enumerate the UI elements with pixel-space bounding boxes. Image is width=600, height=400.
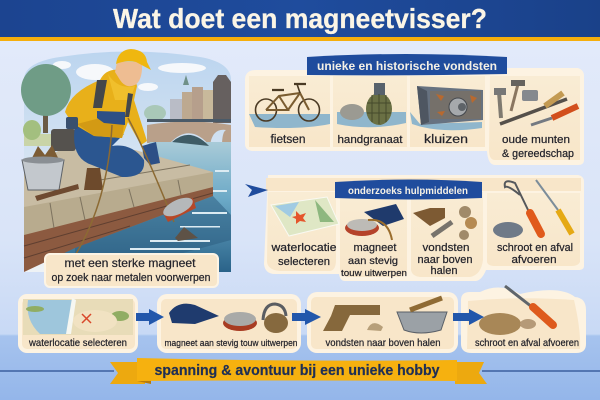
card: oude munten & gereedschap: & gereedschap bbox=[502, 148, 574, 160]
card: fietsen bbox=[249, 76, 330, 147]
step 4: schroot en afval afvoeren: schroot en afval afvoeren bbox=[475, 338, 579, 349]
icon: map bbox=[271, 197, 339, 236]
card: handgranaat: handgranaat bbox=[338, 134, 402, 146]
icon: hook and screwdriver tools bbox=[493, 180, 572, 238]
step 3: vondsten naar boven halen: vondsten naar boven halen bbox=[326, 337, 441, 349]
jeans bbox=[74, 126, 144, 177]
rock block bbox=[51, 129, 76, 151]
title: Wat doet een magneetvisser? bbox=[113, 3, 487, 34]
ribbon: unieke en historische vondsten: unieke en historische vondsten bbox=[317, 61, 497, 73]
step 2: magneet aan stevig touw uitwerpen bbox=[157, 294, 301, 353]
ribbon: unieke en historische vondsten bbox=[307, 54, 507, 75]
card: vondsten naar boven halen: naar boven bbox=[418, 254, 472, 266]
quay top bbox=[24, 150, 213, 210]
panel: unieke en historische vondsten bbox=[245, 54, 584, 165]
scene background bbox=[24, 52, 231, 272]
stone joints bbox=[40, 165, 190, 228]
caption: scene bbox=[45, 254, 218, 287]
icon: hand grenade bbox=[337, 83, 406, 127]
card: waterlocatie selecteren: waterlocatie bbox=[270, 242, 336, 254]
ribbon: onderzoeks hulpmiddelen: onderzoeks hulpmiddelen bbox=[348, 185, 468, 197]
icon: tools bbox=[494, 80, 578, 125]
header banner bbox=[0, 0, 600, 41]
card: schroot en afval afvoeren: schroot en afval bbox=[497, 242, 573, 254]
caption: scene: met een sterke magneet bbox=[64, 256, 196, 270]
icon: magnet with glove bbox=[345, 204, 404, 240]
banner: spanning & avontuur: spanning & avontuur bij een unieke hobby bbox=[154, 362, 440, 379]
quay brick wall bbox=[24, 186, 213, 272]
banner: spanning & avontuur bbox=[110, 358, 487, 384]
hoodie shade bbox=[77, 118, 125, 138]
water dark shore bbox=[75, 196, 231, 272]
icon: map with cross bbox=[23, 298, 133, 335]
glove bbox=[97, 111, 125, 125]
trees bbox=[21, 64, 166, 146]
decorative lines beside banner bbox=[0, 370, 600, 372]
arrow: step 3 to 4 bbox=[453, 309, 484, 325]
caption: scene: op zoek naar metalen voorwerpen bbox=[52, 272, 210, 284]
card: oude munten & gereedschap: oude munten bbox=[502, 134, 570, 146]
step 3: vondsten naar boven halen bbox=[307, 292, 458, 353]
icon: finds bbox=[413, 206, 477, 240]
card: kluizen bbox=[410, 76, 485, 147]
card: schroot en afval afvoeren: afvoeren bbox=[512, 254, 556, 266]
card: vondsten naar boven halen: halen bbox=[430, 265, 458, 277]
card: waterlocatie selecteren bbox=[267, 192, 339, 271]
header strip bbox=[266, 178, 581, 191]
clouds bbox=[53, 61, 206, 91]
icon: pistol and bucket bbox=[323, 298, 447, 333]
card: fietsen: fietsen bbox=[270, 134, 306, 146]
card: handgranaat bbox=[333, 76, 407, 147]
icon: safe bbox=[410, 86, 483, 130]
icon: bicycle bbox=[256, 84, 320, 121]
panel: magneetvisser scene bbox=[21, 49, 231, 272]
icon: rock and screwdriver bbox=[479, 286, 553, 335]
card: magneet aan stevig touw uitwerpen: aan stevig bbox=[348, 255, 398, 267]
yellow hoodie bbox=[65, 70, 147, 145]
second glove bbox=[142, 142, 160, 165]
step 1: waterlocatie selecteren bbox=[18, 294, 138, 353]
brick rows bbox=[24, 193, 213, 258]
card: vondsten naar boven halen bbox=[411, 192, 483, 277]
bucket with finds bbox=[22, 145, 64, 190]
card: schroot en afval afvoeren bbox=[487, 180, 580, 266]
arch shadow bbox=[172, 135, 209, 146]
arrow: scene to tools bbox=[245, 184, 268, 197]
magnet in water bbox=[161, 194, 198, 241]
arrow: step 2 to 3 bbox=[292, 309, 321, 325]
backpack pouch bbox=[66, 117, 78, 129]
step 1: waterlocatie selecteren: waterlocatie selecteren bbox=[28, 337, 127, 349]
backpack strap bbox=[93, 80, 107, 108]
card: magneet aan stevig touw uitwerpen: touw uitwerpen bbox=[341, 268, 407, 279]
card: kluizen: kluizen bbox=[424, 134, 468, 146]
icon: glove, magnet and padlock bbox=[169, 304, 288, 333]
card: magneet aan stevig touw uitwerpen bbox=[340, 192, 407, 279]
canal water bbox=[45, 142, 231, 272]
card: magneet aan stevig touw uitwerpen: magneet bbox=[354, 242, 396, 254]
hood opening bbox=[108, 74, 135, 100]
panel: onderzoeks hulpmiddelen bbox=[264, 175, 584, 281]
angler bbox=[65, 49, 174, 254]
water highlights bbox=[130, 170, 229, 250]
card: oude munten & gereedschap bbox=[489, 76, 580, 160]
rope bbox=[76, 118, 174, 254]
card: waterlocatie selecteren: selecteren bbox=[278, 256, 330, 268]
cap bbox=[116, 49, 151, 70]
card: vondsten naar boven halen: vondsten bbox=[422, 242, 470, 254]
bridge bbox=[147, 122, 231, 146]
arrow: step 1 to 2 bbox=[136, 309, 164, 325]
icon: water bbox=[249, 114, 330, 128]
step 4: schroot en afval afvoeren bbox=[461, 286, 586, 353]
boot bbox=[84, 168, 103, 190]
hammer on quay bbox=[35, 184, 79, 201]
ribbon: onderzoeks hulpmiddelen bbox=[335, 180, 482, 200]
face bbox=[115, 62, 142, 86]
step 2: magneet aan stevig touw uitwerpen: magneet aan stevig touw uitwerpen bbox=[164, 338, 298, 349]
quay stones bbox=[24, 172, 213, 235]
canal houses bbox=[170, 75, 231, 123]
